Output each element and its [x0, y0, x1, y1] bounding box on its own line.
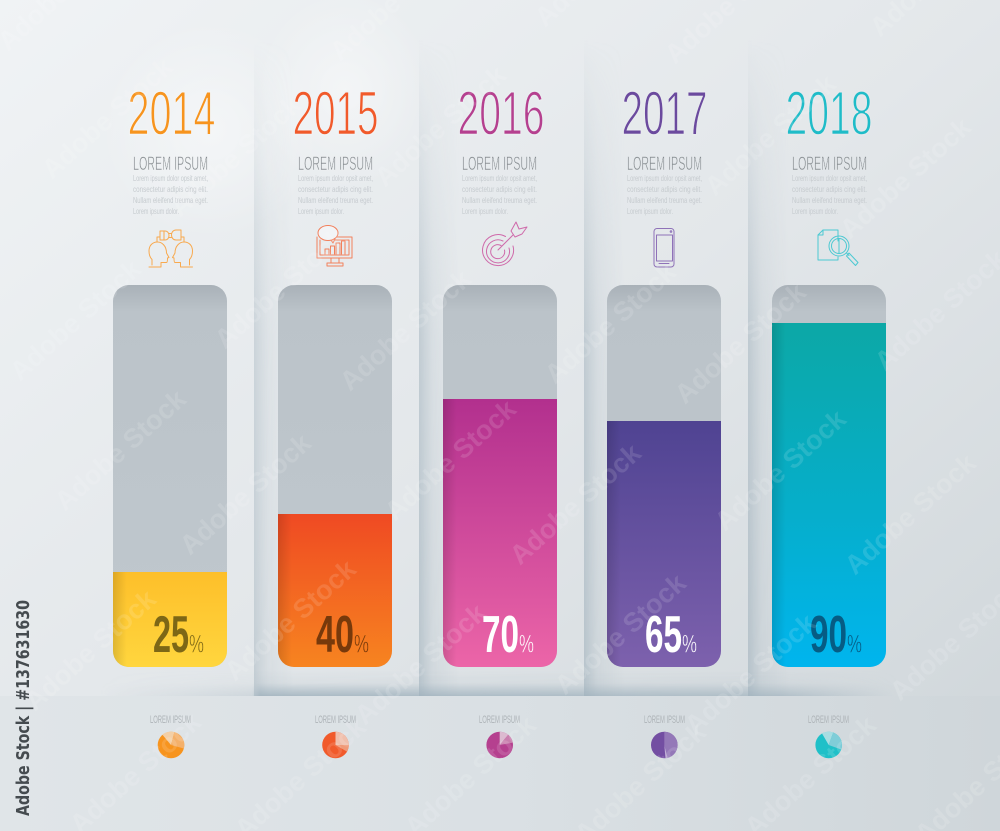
body text 2017: consectetur adipis cing elit.	[627, 184, 702, 194]
value 90%: 90	[810, 606, 847, 664]
heading 2018: LOREM IPSUM	[792, 153, 867, 175]
watermarks: Adobe Stock	[4, 253, 147, 386]
icon: target with arrow	[483, 222, 527, 266]
body text 2014: Lorem ipsum dolor opsit amet,	[133, 173, 208, 183]
pie 2018	[815, 732, 842, 758]
body text 2017: Lorem ipsum dolor.	[627, 206, 673, 216]
legend label 2014: LOREM IPSUM	[150, 714, 191, 726]
value 25%: %	[189, 630, 204, 658]
legend label 2015: LOREM IPSUM	[315, 714, 356, 726]
watermarks: Adobe Stock	[334, 263, 477, 396]
pie 2016	[486, 732, 513, 758]
body text 2017: Lorem ipsum dolor opsit amet,	[627, 173, 702, 183]
body text 2016	[462, 173, 537, 216]
body text 2017	[627, 173, 702, 216]
pie 2015	[322, 732, 349, 758]
year 2017: 2017	[622, 80, 708, 148]
year 2015: 2015	[292, 80, 378, 148]
value 70%: 70	[482, 606, 519, 664]
body text 2015: Lorem ipsum dolor opsit amet,	[298, 173, 373, 183]
watermarks: Adobe Stock	[369, 59, 512, 192]
watermarks: Adobe Stock	[174, 427, 317, 560]
watermarks: Adobe Stock	[549, 567, 692, 700]
watermarks: Adobe Stock	[164, 89, 307, 222]
watermarks: Adobe Stock	[49, 383, 192, 516]
value 65%: %	[682, 630, 697, 658]
body text 2015: Nullam eleifend treuma eget.	[298, 195, 373, 205]
bar 2014	[113, 285, 227, 667]
column 2015	[278, 80, 392, 758]
legend label 2016: LOREM IPSUM	[479, 714, 520, 726]
body text 2016: consectetur adipis cing elit.	[462, 184, 537, 194]
bar 2016	[443, 285, 557, 667]
body text 2016: Lorem ipsum dolor opsit amet,	[462, 173, 537, 183]
column 2018	[772, 80, 886, 758]
body text 2015: Lorem ipsum dolor.	[298, 206, 344, 216]
body text 2014: Nullam eleifend treuma eget.	[133, 195, 208, 205]
body text 2014: consectetur adipis cing elit.	[133, 184, 208, 194]
watermarks: Adobe Stock	[379, 393, 522, 526]
vertical stock id text: Adobe Stock | #137631630	[13, 600, 34, 816]
icon: smartphone	[654, 228, 674, 267]
bar 2018	[772, 285, 886, 667]
bar 2015	[278, 285, 392, 667]
year 2016: 2016	[458, 80, 544, 148]
legend label 2018: LOREM IPSUM	[808, 714, 849, 726]
heading 2016: LOREM IPSUM	[462, 153, 537, 175]
value 40%: 40	[316, 606, 354, 664]
body text 2016: Lorem ipsum dolor.	[462, 206, 508, 216]
icon: monitor with chart	[317, 226, 352, 266]
body text 2015: consectetur adipis cing elit.	[298, 184, 373, 194]
body text 2017: Nullam eleifend treuma eget.	[627, 195, 702, 205]
column 2016	[443, 80, 557, 758]
body text 2018: consectetur adipis cing elit.	[792, 184, 867, 194]
bar 2017	[607, 285, 721, 667]
watermarks: Adobe Stock	[219, 553, 362, 686]
column panels with stepped shadows	[162, 80, 872, 696]
year 2014: 2014	[128, 80, 216, 148]
body text 2018: Nullam eleifend treuma eget.	[792, 195, 867, 205]
value 65%: 65	[645, 606, 682, 664]
value 90%: %	[847, 630, 862, 658]
watermarks: Adobe Stock	[834, 111, 977, 244]
value 25%: 25	[153, 606, 189, 664]
body text 2018: Lorem ipsum dolor opsit amet,	[792, 173, 867, 183]
watermarks: Adobe Stock	[349, 597, 492, 730]
body text 2018	[792, 173, 867, 216]
watermarks: Adobe Stock	[539, 256, 682, 389]
value 40%: %	[354, 630, 369, 658]
watermarks: Adobe Stock	[699, 68, 842, 201]
watermarks: Adobe Stock	[19, 583, 162, 716]
body text 2014: Lorem ipsum dolor.	[133, 206, 179, 216]
column 2017	[607, 80, 721, 758]
pie 2017	[651, 732, 678, 758]
watermarks: Adobe Stock	[209, 221, 352, 354]
heading 2014: LOREM IPSUM	[133, 153, 208, 175]
body text 2014	[133, 173, 208, 216]
column 2014	[113, 80, 227, 758]
year 2018: 2018	[786, 80, 872, 148]
watermarks: Adobe Stock	[839, 447, 982, 580]
icon: heads with plug	[149, 230, 192, 267]
floor band	[0, 696, 1000, 831]
legend label 2017: LOREM IPSUM	[644, 714, 685, 726]
body text 2016: Nullam eleifend treuma eget.	[462, 195, 537, 205]
watermarks: Adobe Stock	[36, 51, 179, 184]
value 70%: %	[519, 630, 534, 658]
heading 2017: LOREM IPSUM	[627, 153, 702, 175]
watermarks: Adobe Stock	[679, 607, 822, 740]
watermarks: Adobe Stock	[504, 437, 647, 570]
body text 2015	[298, 173, 373, 216]
icon: document with magnifier	[818, 230, 858, 266]
pie 2014	[158, 732, 184, 758]
watermarks: Adobe Stock	[709, 403, 852, 536]
body text 2018: Lorem ipsum dolor.	[792, 206, 838, 216]
heading 2015: LOREM IPSUM	[298, 153, 373, 175]
watermarks: Adobe Stock	[669, 276, 812, 409]
